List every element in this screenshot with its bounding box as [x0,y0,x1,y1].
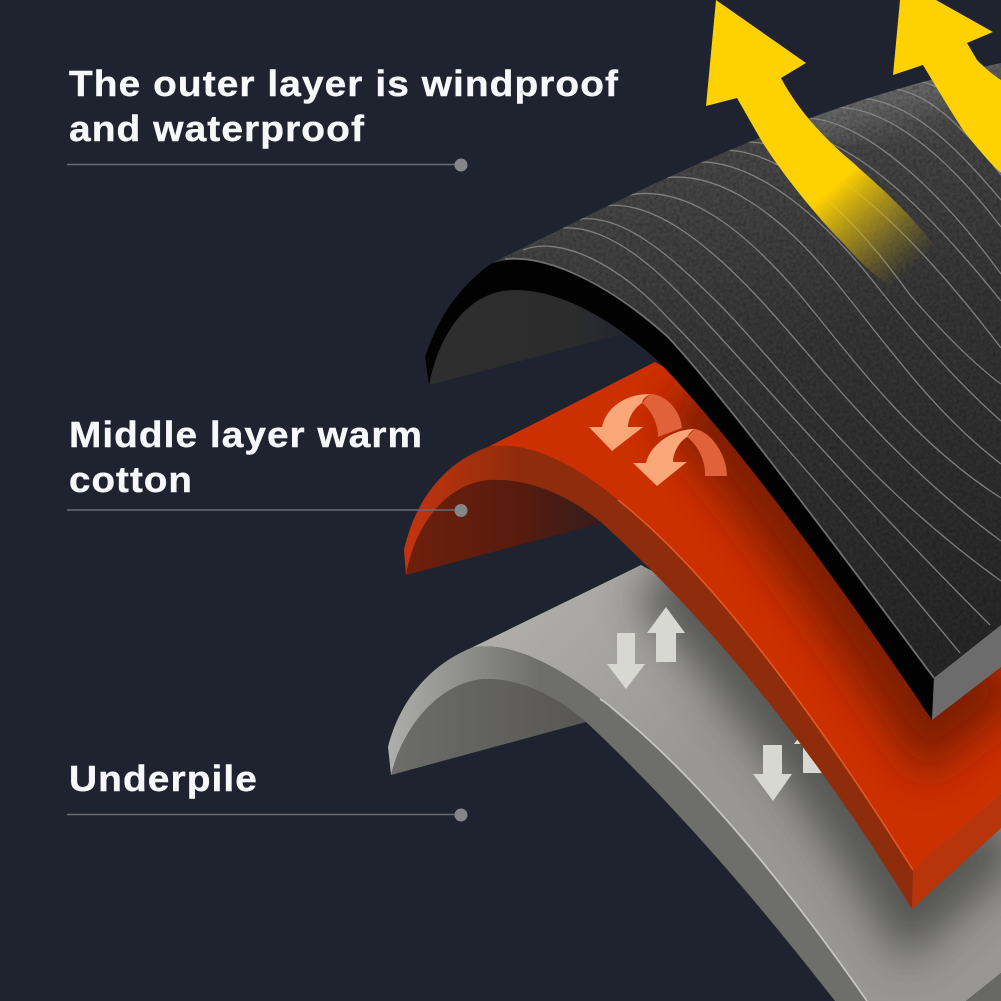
icon: curved circulation arrow one [589,394,682,451]
shell cut edge [425,260,934,720]
stitched quilting lines [523,68,1001,653]
label: underpile: Underpile [69,758,258,799]
label: outer layer: and waterproof [69,108,365,149]
icon: curved circulation arrow two [633,429,727,486]
icon: large yellow arrow, right [893,0,1001,173]
outer layer: windproof shell [425,60,1001,720]
shell right side strip [932,623,1001,720]
label: outer layer [67,63,619,172]
middle layer: warm cotton [404,355,1001,909]
leader line: middle layer [67,504,468,517]
underpile underside [391,679,586,775]
shell top surface [480,60,1001,685]
underpile cut edge [388,647,867,1001]
cotton underside [406,480,602,575]
leader line: outer layer [67,158,468,172]
label: underpile [67,758,468,822]
label: outer layer: The outer layer is windproof [69,63,619,104]
cotton cut edge [404,446,913,909]
icon: up and down arrows, first pair [607,607,685,689]
inner layer: underpile [388,540,1001,1001]
icon: up and down arrows, second pair [753,718,832,801]
leader line: underpile [67,808,468,822]
right side strip [966,973,1001,1001]
label: middle layer: cotton [69,459,193,500]
shell underside [429,290,626,385]
icon: large yellow arrow, left [706,0,950,290]
cotton top surface [480,355,1001,875]
label: middle layer [67,414,468,517]
underpile top surface [471,565,1001,1001]
label: middle layer: Middle layer warm [69,414,423,455]
right side strip [912,793,1001,909]
